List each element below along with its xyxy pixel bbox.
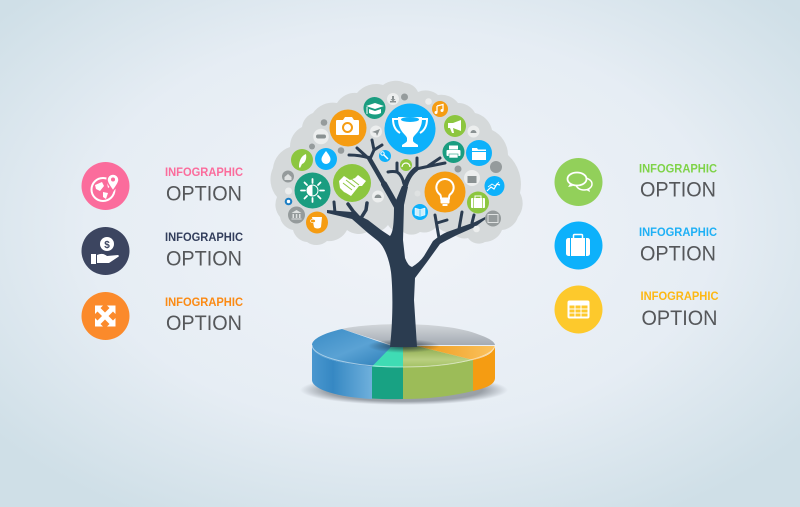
label: OPTION: [642, 307, 718, 330]
right option 1: [554, 158, 717, 206]
icon: globe with map pin: [82, 162, 130, 210]
icon: table grid: [554, 286, 602, 334]
icon: water drop: [315, 148, 337, 170]
icon: expand arrows: [82, 292, 130, 340]
left option 1: [82, 162, 243, 210]
top: blue: [312, 329, 403, 366]
right option 3: [554, 286, 719, 334]
icon: hand holding coin: $: [104, 240, 110, 251]
icon: handshake: [333, 164, 371, 202]
icon: camera: [330, 110, 366, 146]
top: teal: [372, 346, 403, 367]
icon: speech bubbles: [554, 158, 602, 206]
top: gray: [342, 324, 495, 345]
icon: suitcase small: [467, 192, 489, 214]
label: OPTION: [640, 242, 716, 266]
label: INFOGRAPHIC: [639, 162, 717, 176]
icon: sun contrast: [294, 172, 330, 208]
tree canopy cloud: [270, 81, 523, 245]
label: INFOGRAPHIC: [639, 225, 717, 239]
top: green: [403, 346, 473, 367]
tree icons: [282, 93, 504, 234]
icon: suitcase: [554, 222, 602, 270]
icon: megaphone: [444, 115, 466, 137]
side: green: [403, 360, 473, 399]
pie base: [300, 324, 508, 405]
icon: cup: [306, 212, 328, 234]
icon: printer: [442, 141, 464, 163]
trunk shadow: [368, 339, 440, 353]
icon: trophy: [384, 104, 436, 154]
left option 3: [82, 292, 243, 340]
icon: key: [379, 150, 391, 162]
label: INFOGRAPHIC: [165, 230, 243, 244]
left option 2: [82, 227, 243, 275]
top edge highlight: [312, 345, 495, 367]
small gray icons: [282, 93, 502, 232]
label: OPTION: [640, 178, 716, 202]
icon: hand holding coin: [82, 227, 130, 275]
icon: small green cloud: [400, 159, 412, 171]
side: blue: [312, 345, 372, 399]
label: OPTION: [166, 248, 242, 270]
icon: music note: [432, 101, 448, 117]
label: OPTION: [166, 182, 242, 206]
icon: line chart: [484, 176, 504, 196]
label: INFOGRAPHIC: [165, 165, 243, 179]
icon: folder: [466, 140, 492, 166]
trunk: [327, 186, 487, 347]
tree: [327, 140, 487, 347]
side: orange: [473, 345, 495, 391]
ground shadow: [300, 375, 508, 405]
branches: [334, 140, 474, 238]
icon: open book: [412, 204, 428, 220]
top: orange: [417, 346, 495, 360]
icon: light bulb: [424, 172, 466, 212]
icon: feather: [291, 149, 313, 171]
right option 2: [554, 222, 717, 270]
label: OPTION: [166, 312, 242, 335]
side: teal: [372, 366, 403, 399]
icon: small blue clock: [285, 198, 292, 205]
label: INFOGRAPHIC: [640, 289, 719, 303]
label: INFOGRAPHIC: [165, 295, 243, 309]
icon: graduation cap: [364, 97, 386, 119]
